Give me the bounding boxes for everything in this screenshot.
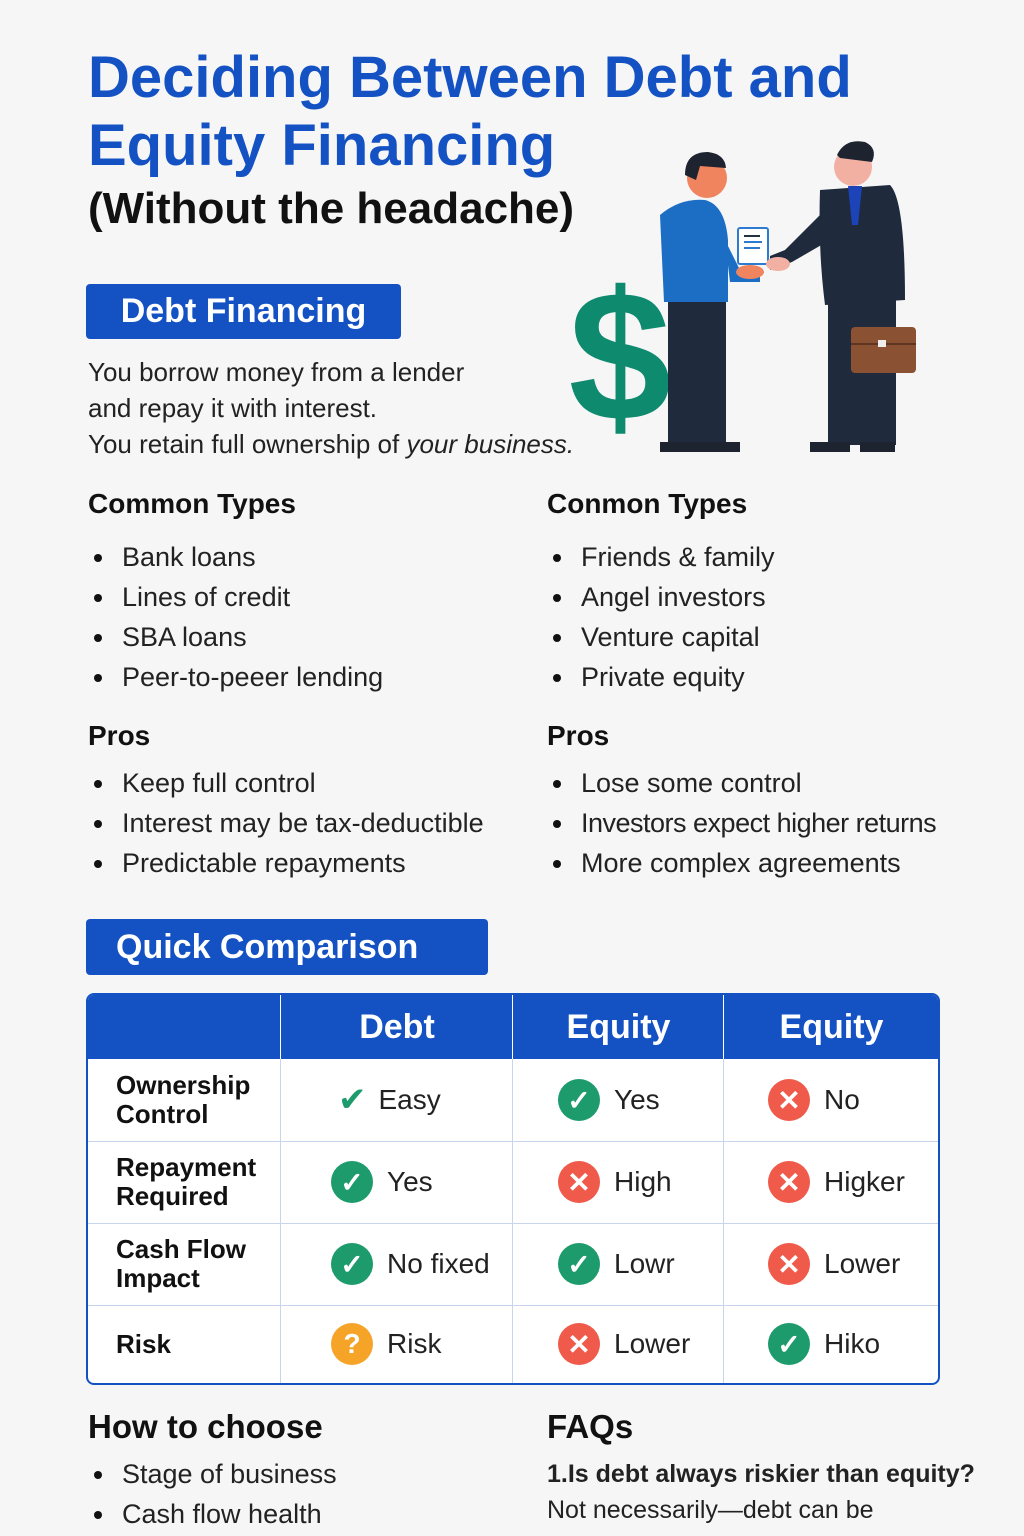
list: equity types: Private equity (581, 662, 745, 692)
comparison table: Equity (567, 1008, 670, 1046)
comparison table: Cash Flow (116, 1234, 246, 1264)
comparison table: ✕ (777, 1166, 801, 1198)
comparison table: Higker (824, 1166, 905, 1197)
text: FAQ: 1.Is debt always riskier than equity? (547, 1460, 975, 1488)
list: equity types: Venture capital (581, 622, 760, 652)
list: equity types: Friends & family (581, 542, 775, 572)
comparison table: Debt (359, 1008, 435, 1046)
text: debt description: You retain full ownership of your business. (88, 429, 574, 459)
illustration: handshake with dollar sign (569, 141, 916, 460)
comparison table: Risk (387, 1328, 441, 1359)
list: debt pros: Interest may be tax-deductible (122, 808, 484, 838)
heading: pros equity: Pros (547, 720, 609, 751)
comparison table: ✓ (340, 1166, 364, 1198)
icon: dollar sign: $ (569, 254, 671, 460)
list: equity pros: Investors expect higher returns (581, 808, 936, 838)
text: debt description (88, 357, 574, 459)
comparison table: Ownership (116, 1070, 250, 1100)
button: quick comparison (86, 919, 488, 975)
button: debt financing: Debt Financing (121, 292, 366, 330)
heading: FAQs: FAQs (547, 1408, 633, 1445)
list: how to choose: Cash flow health (122, 1499, 322, 1529)
comparison table: Repayment (116, 1152, 256, 1182)
list: debt types: Peer-to-peeer lending (122, 662, 383, 692)
title: Equity Financing (88, 113, 555, 178)
comparison table: No (824, 1084, 860, 1115)
title (88, 45, 852, 178)
list: debt pros (94, 768, 484, 878)
list: equity pros: More complex agreements (581, 848, 901, 878)
list: debt pros: Predictable repayments (122, 848, 406, 878)
comparison table: Required (116, 1181, 229, 1211)
text: FAQ: Not necessarily—debt can be (547, 1496, 874, 1524)
comparison table: ✓ (567, 1084, 591, 1116)
comparison table: High (614, 1166, 672, 1197)
comparison table: ✓ (340, 1248, 364, 1280)
comparison table: Impact (116, 1263, 200, 1293)
list: debt types: SBA loans (122, 622, 247, 652)
button: debt financing (86, 284, 401, 339)
comparison table: Lower (824, 1248, 900, 1279)
comparison table: ✕ (777, 1248, 801, 1280)
list: how to choose: Stage of business (122, 1459, 337, 1489)
list: equity types: Angel investors (581, 582, 766, 612)
list: equity types (553, 542, 775, 692)
comparison table: Control (116, 1099, 208, 1129)
list: debt pros: Keep full control (122, 768, 316, 798)
text: debt description: and repay it with interest. (88, 393, 377, 423)
comparison table: ✕ (567, 1328, 591, 1360)
list: debt types: Bank loans (122, 542, 256, 572)
text: FAQ (547, 1460, 975, 1524)
comparison table: ✓ (567, 1248, 591, 1280)
comparison table: Yes (387, 1166, 433, 1197)
comparison table: Equity (780, 1008, 883, 1046)
heading: common types debt: Common Types (88, 488, 296, 519)
comparison table: Yes (614, 1084, 660, 1115)
list: how to choose (94, 1459, 337, 1529)
comparison table: Lowr (614, 1248, 675, 1279)
button: quick comparison: Quick Comparison (116, 928, 418, 966)
comparison table: ✓ (777, 1328, 801, 1360)
comparison table: ✕ (777, 1084, 801, 1116)
heading: pros debt: Pros (88, 720, 150, 751)
heading: common types equity: Conmon Types (547, 488, 747, 519)
comparison table: ? (343, 1328, 361, 1359)
comparison table: ✔ (338, 1081, 366, 1119)
comparison table: ✕ (567, 1166, 591, 1198)
comparison table: No fixed (387, 1248, 490, 1279)
list: debt types (94, 542, 383, 692)
text: debt description: You borrow money from a lender (88, 357, 464, 387)
comparison table (86, 993, 940, 1385)
comparison table: Hiko (824, 1328, 880, 1359)
list: equity pros: Lose some control (581, 768, 802, 798)
comparison table: Lower (614, 1328, 690, 1359)
heading: how to choose: How to choose (88, 1408, 323, 1445)
title: Deciding Between Debt and (88, 45, 852, 110)
comparison table: Risk (116, 1328, 171, 1358)
comparison table: Easy (378, 1084, 441, 1115)
subtitle: (Without the headache) (88, 184, 574, 233)
list: debt types: Lines of credit (122, 582, 290, 612)
list: equity pros (553, 768, 936, 878)
